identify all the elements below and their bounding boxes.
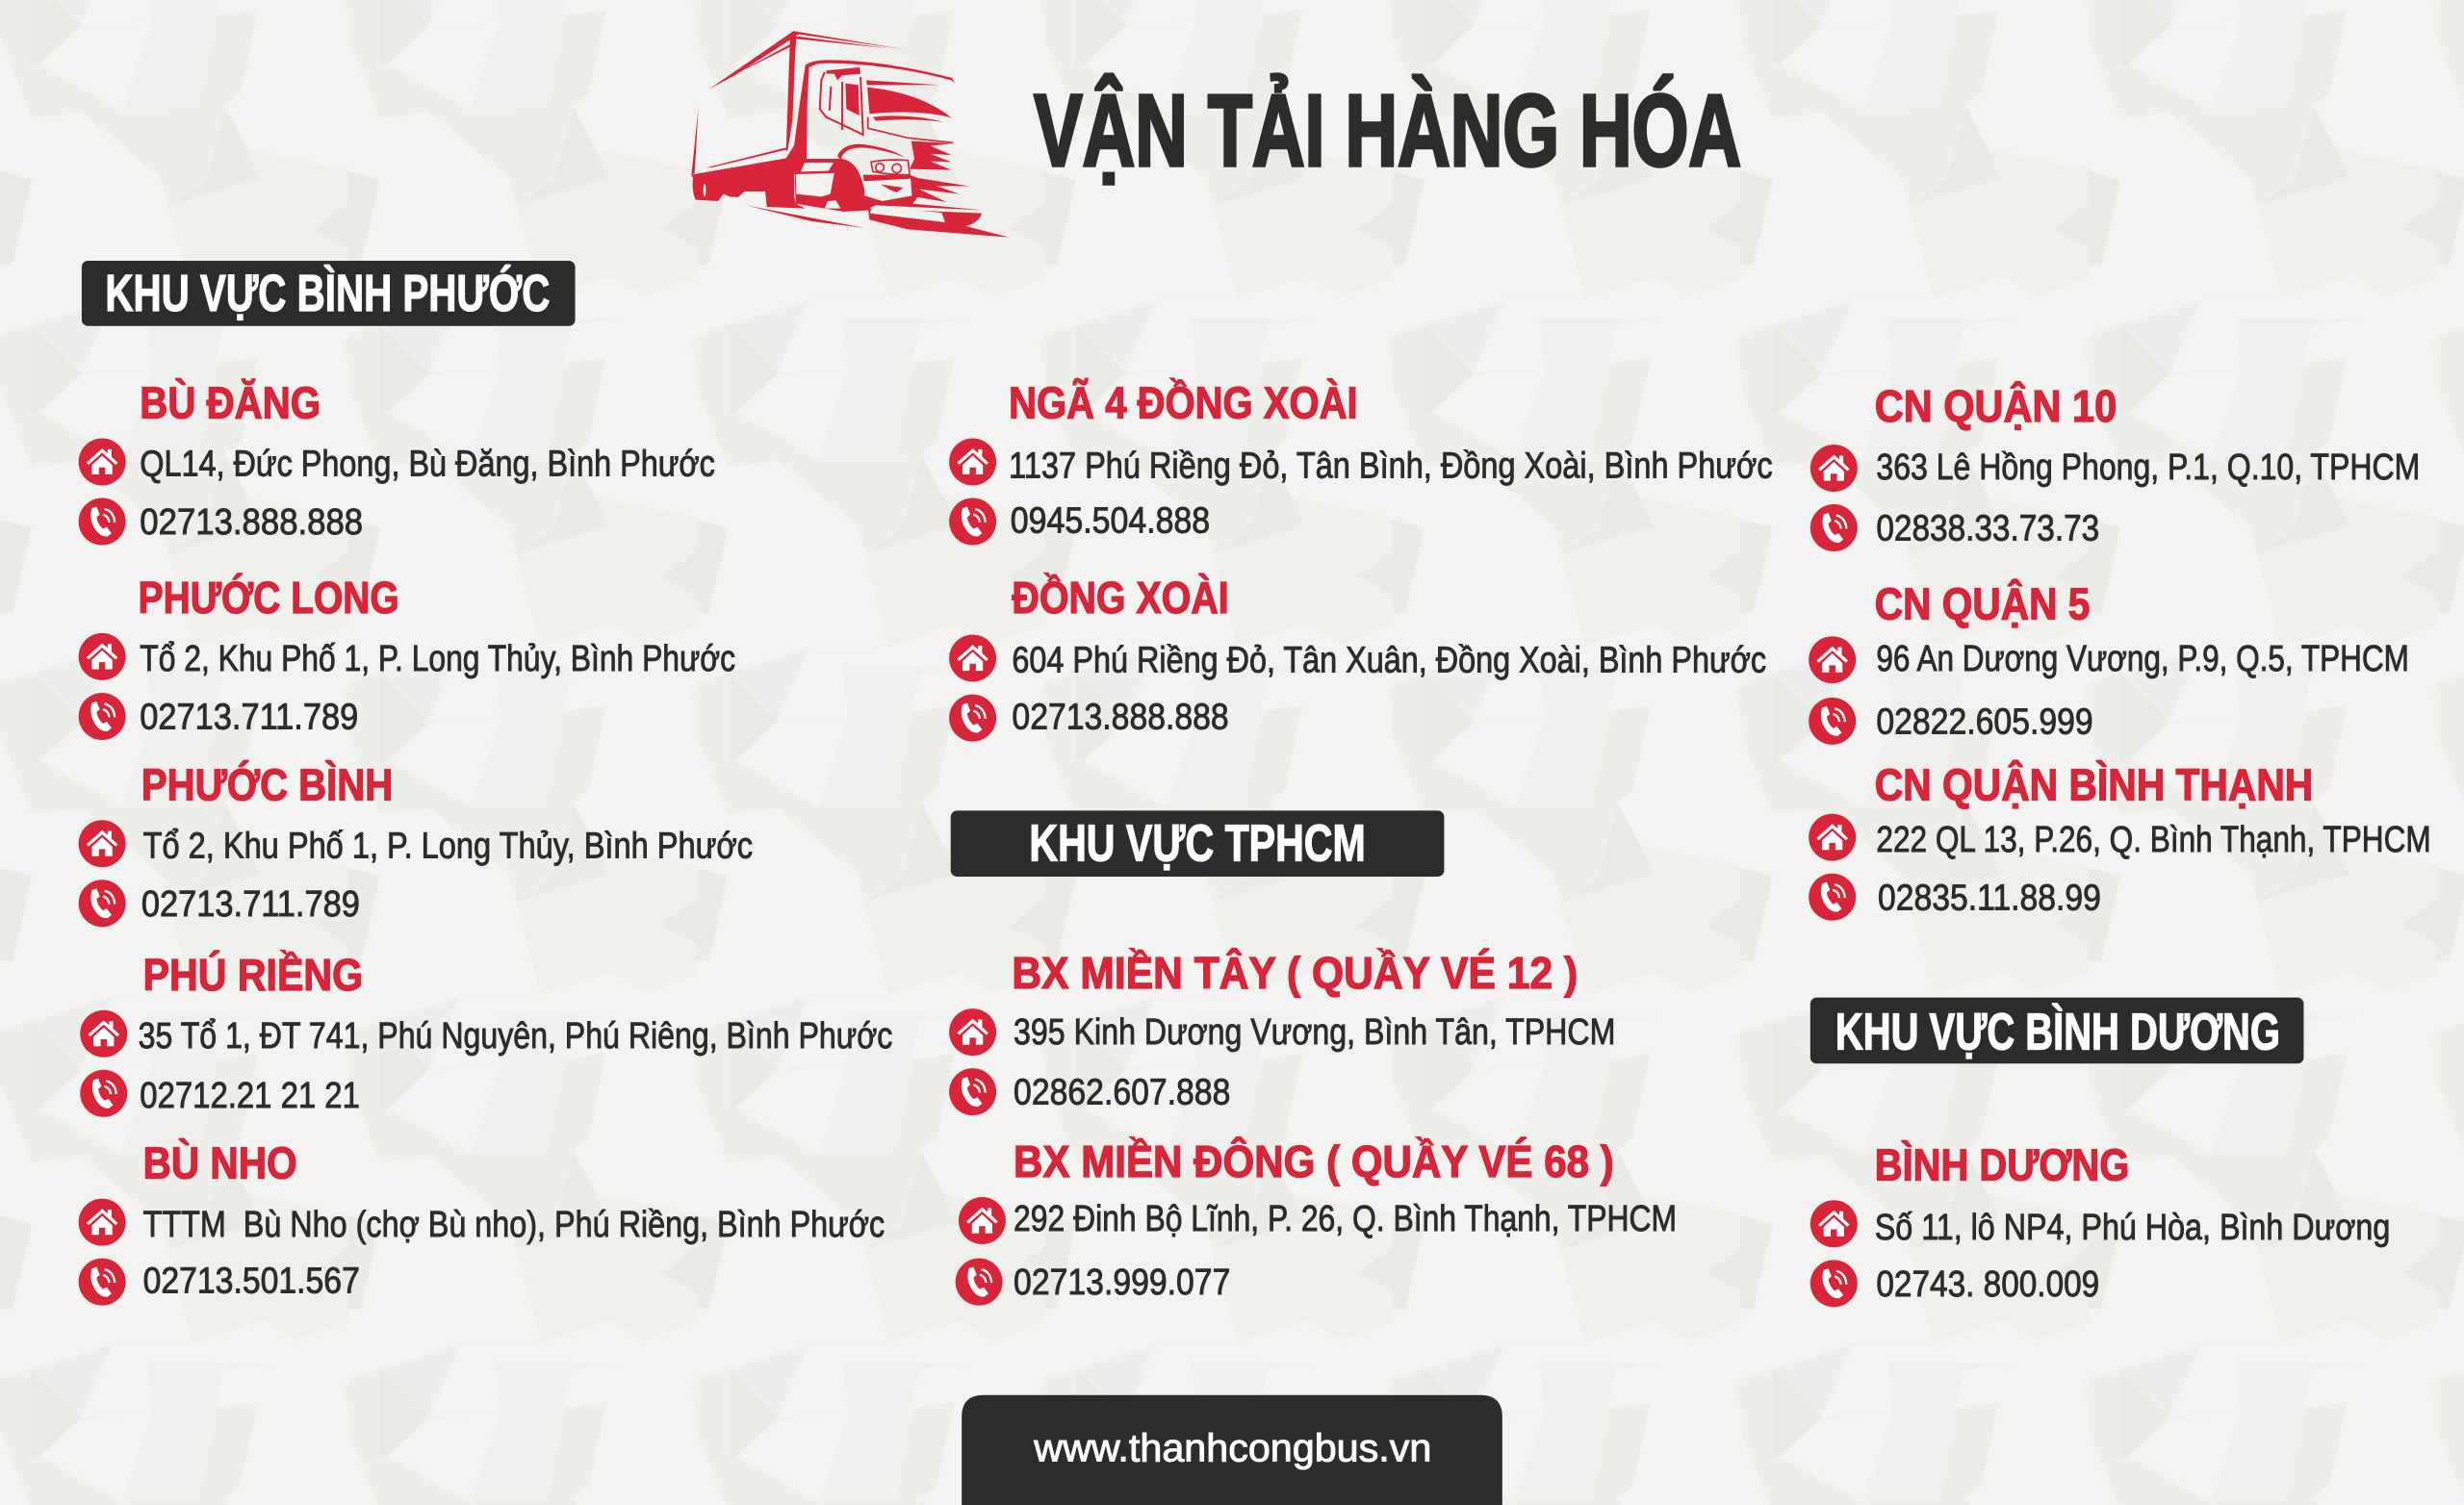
panel: Bù Đăng: 02713.888.888 <box>140 501 363 542</box>
panel: CN Quận Bình Thạnh: CN QUẬN BÌNH THẠNH <box>1875 759 2313 809</box>
panel: CN Quận Bình Thạnh: 02835.11.88.99 <box>1878 877 2101 917</box>
section heading: Khu vực Bình Dương <box>1810 998 2303 1063</box>
panel: CN Quận 5: CN QUẬN 5 <box>1875 579 2090 629</box>
panel: Phước Bình <box>79 759 753 927</box>
panel: Đồng Xoài: ĐỒNG XOÀI <box>1012 573 1229 623</box>
panel: CN Quận Bình Thạnh <box>1809 759 2431 921</box>
panel: Phước Long: 02713.711.789 <box>140 697 358 737</box>
icon: red truck <box>691 31 1009 238</box>
panel: CN Quận 5: 02822.605.999 <box>1876 701 2093 741</box>
panel: Phước Long <box>79 573 735 740</box>
panel: BX Miền Tây: 395 Kinh Dương Vương, Bình Tân, TPHCM <box>1014 1011 1615 1052</box>
panel: Phước Long: Tổ 2, Khu Phố 1, P. Long Thủy, Bình Phước <box>140 638 735 678</box>
panel: Bình Dương: BÌNH DƯƠNG <box>1875 1139 2129 1189</box>
panel: Bình Dương: Số 11, lô NP4, Phú Hòa, Bình Dương <box>1875 1207 2390 1247</box>
panel: Ngã 4 Đồng Xoài: NGÃ 4 ĐỒNG XOÀI <box>1009 378 1358 428</box>
panel: Bù Nho: BÙ NHO <box>143 1138 297 1188</box>
panel: CN Quận 10: 02838.33.73.73 <box>1876 508 2099 548</box>
panel: Phước Bình: PHƯỚC BÌNH <box>141 759 393 809</box>
panel: Phú Riềng: 02712.21 21 21 <box>140 1075 360 1115</box>
panel: Bù Đăng: QL14, Đức Phong, Bù Đăng, Bình Phước <box>140 444 715 484</box>
section heading: Khu vực Bình Phước: KHU VỰC BÌNH PHƯỚC <box>105 265 550 322</box>
panel: Phước Bình: Tổ 2, Khu Phố 1, P. Long Thủy, Bình Phước <box>143 825 753 865</box>
panel: Phú Riềng <box>80 950 892 1117</box>
panel: Bù Đăng: BÙ ĐĂNG <box>140 378 321 428</box>
panel: Bù Nho: 02713.501.567 <box>143 1261 360 1301</box>
panel: Đồng Xoài: 604 Phú Riềng Đỏ, Tân Xuân, Đồng Xoài, Bình Phước <box>1012 640 1766 680</box>
panel: BX Miền Tây: 02862.607.888 <box>1014 1072 1230 1112</box>
panel: CN Quận 5 <box>1809 579 2409 745</box>
footer: website <box>962 1395 1502 1505</box>
panel: BX Miền Tây <box>949 948 1615 1115</box>
title: VẬN TẢI HÀNG HÓA <box>1034 73 1741 188</box>
panel: BX Miền Đông: 02713.999.077 <box>1014 1262 1230 1302</box>
section heading: Khu vực Bình Phước <box>82 261 576 326</box>
panel: BX Miền Tây: BX MIỀN TÂY ( QUẦY VÉ 12 ) <box>1012 948 1578 998</box>
panel: Phú Riềng: PHÚ RIỀNG <box>143 950 363 1000</box>
panel: Ngã 4 Đồng Xoài: 1137 Phú Riềng Đỏ, Tân Bình, Đồng Xoài, Bình Phước <box>1009 445 1773 485</box>
panel: BX Miền Đông <box>956 1136 1677 1306</box>
panel: Ngã 4 Đồng Xoài: 0945.504.888 <box>1011 499 1210 540</box>
footer: website: www.thanhcongbus.vn <box>1033 1425 1431 1469</box>
panel: Bình Dương: 02743. 800.009 <box>1876 1263 2099 1304</box>
panel: Đồng Xoài <box>949 573 1766 742</box>
panel: Phước Bình: 02713.711.789 <box>141 883 360 924</box>
panel: Bù Nho: TTTM Bù Nho (chợ Bù nho), Phú Riềng, Bình Phước <box>143 1204 885 1244</box>
panel: BX Miền Đông: 292 Đinh Bộ Lĩnh, P. 26, Q. Bình Thạnh, TPHCM <box>1014 1198 1677 1238</box>
panel: Bù Đăng <box>79 378 715 546</box>
panel: Phước Long: PHƯỚC LONG <box>139 573 399 623</box>
panel: Bình Dương <box>1810 1139 2390 1307</box>
section heading: Khu vực Bình Dương: KHU VỰC BÌNH DƯƠNG <box>1835 1004 2280 1061</box>
section heading: Khu vực TPHCM: KHU VỰC TPHCM <box>1029 815 1366 873</box>
panel: Bù Nho <box>79 1138 885 1306</box>
panel: CN Quận 10: CN QUẬN 10 <box>1875 381 2117 431</box>
panel: CN Quận 10 <box>1810 381 2420 551</box>
panel: Phú Riềng: 35 Tổ 1, ĐT 741, Phú Nguyên, Phú Riêng, Bình Phước <box>139 1015 892 1056</box>
panel: Ngã 4 Đồng Xoài <box>949 378 1773 546</box>
panel: BX Miền Đông: BX MIỀN ĐÔNG ( QUẦY VÉ 68 ) <box>1014 1136 1614 1186</box>
panel: Đồng Xoài: 02713.888.888 <box>1012 697 1229 737</box>
